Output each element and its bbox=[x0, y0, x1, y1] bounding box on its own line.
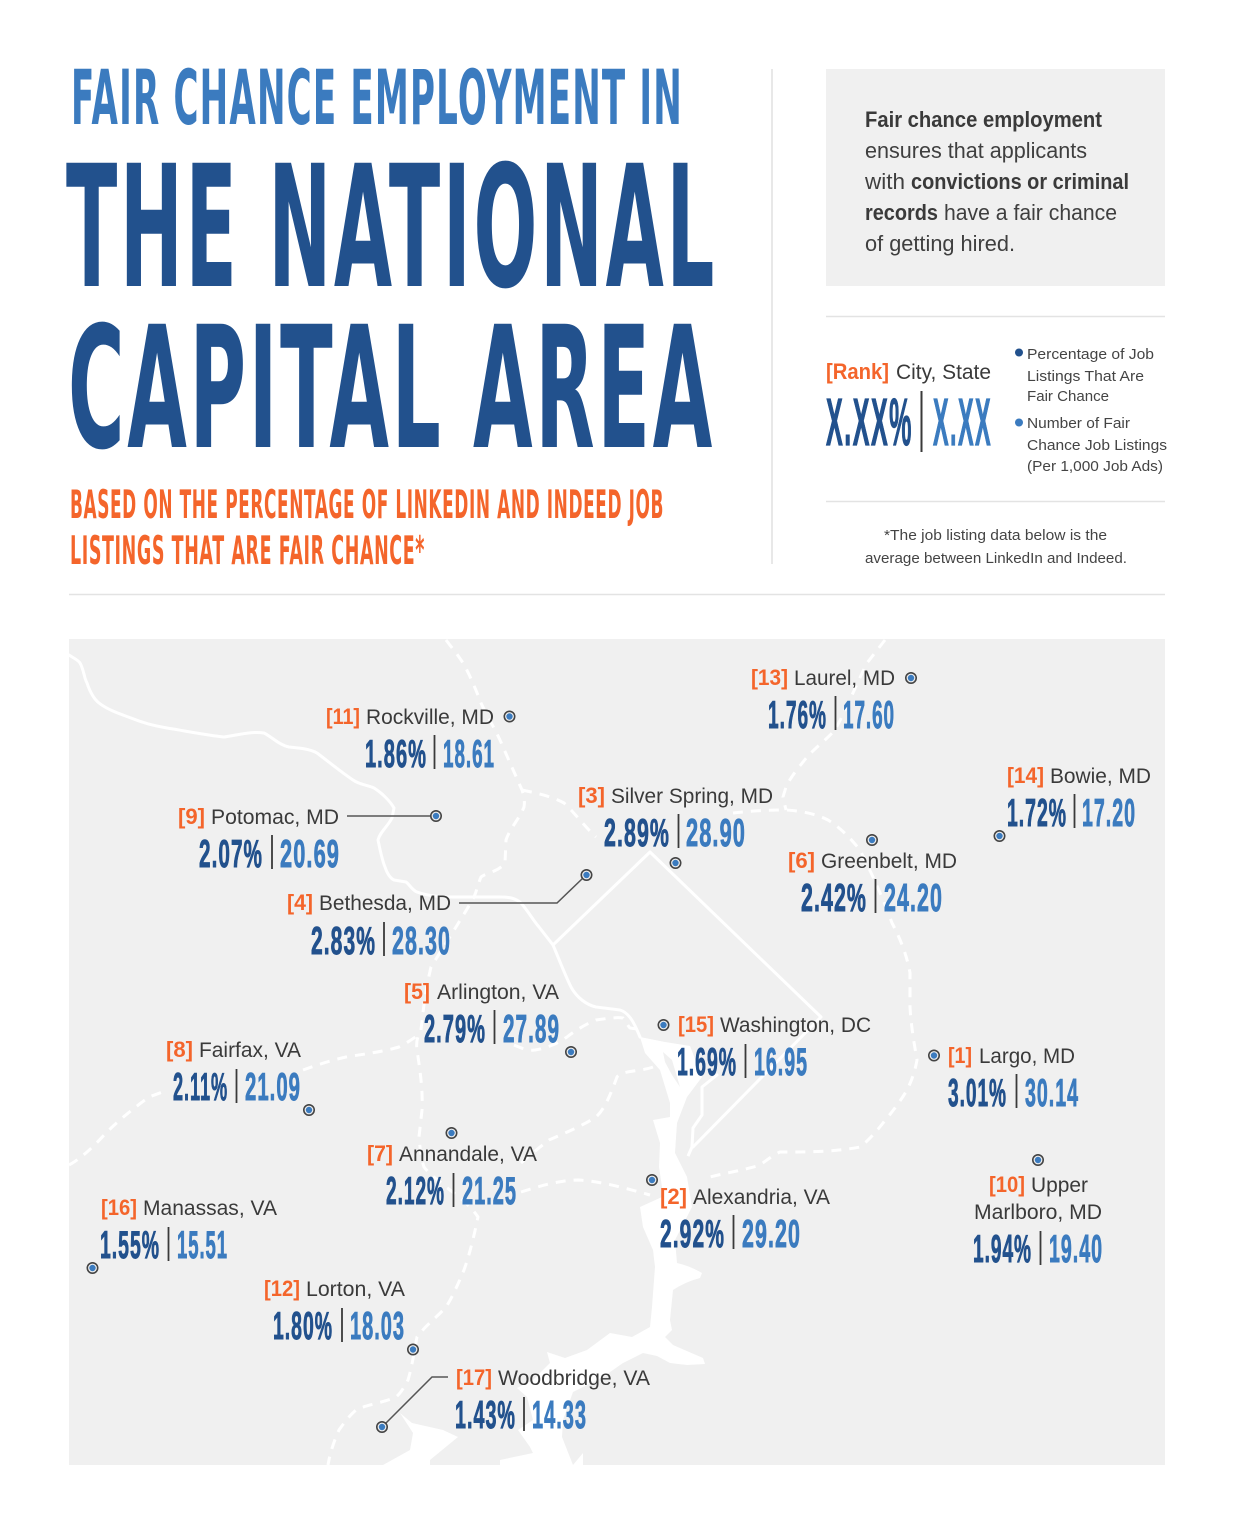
city: Bowie: Bowie, MD bbox=[1050, 765, 1151, 788]
city: Silver Spring: Silver Spring, MD bbox=[611, 785, 773, 808]
city: Arlington: 27.89 bbox=[503, 1008, 560, 1051]
city: Fairfax: [8] bbox=[166, 1037, 193, 1062]
legend: X.XX% bbox=[826, 385, 913, 460]
subtitle bbox=[70, 483, 664, 574]
city: Woodbridge: [17] bbox=[456, 1365, 492, 1390]
legend: Fair Chance bbox=[1027, 388, 1109, 405]
city: Washington: Washington, DC bbox=[720, 1014, 871, 1037]
city: Laurel: 1.76% bbox=[768, 694, 827, 737]
city: Bethesda: [4] bbox=[287, 890, 313, 915]
city: Rockville bbox=[326, 704, 515, 776]
map: solid boundary lines bbox=[69, 655, 821, 1147]
title bbox=[66, 53, 717, 487]
city: Laurel: 17.60 bbox=[843, 694, 895, 737]
panel: definition of fair chance employment: have a fair chance bbox=[944, 200, 1117, 225]
city: Silver Spring: 2.89% bbox=[604, 812, 670, 855]
city: Greenbelt bbox=[788, 835, 957, 920]
legend: [Rank] bbox=[826, 359, 889, 384]
city: Annandale bbox=[367, 1128, 537, 1213]
city: Upper Marlboro: [10] bbox=[989, 1172, 1025, 1197]
city: Rockville: [11] bbox=[326, 704, 360, 729]
map background bbox=[69, 639, 1165, 1465]
city: Manassas: 1.55% bbox=[100, 1224, 160, 1267]
city: Lorton: [12] bbox=[264, 1276, 300, 1301]
city: Arlington: [5] bbox=[404, 979, 430, 1004]
city: Largo: [1] bbox=[948, 1043, 972, 1068]
city: Laurel: Laurel, MD bbox=[794, 667, 895, 690]
city: Bethesda: 28.30 bbox=[392, 920, 451, 963]
city: Upper Marlboro: 19.40 bbox=[1049, 1228, 1103, 1271]
city: Annandale: [7] bbox=[367, 1141, 393, 1166]
city: Manassas: 15.51 bbox=[177, 1224, 228, 1267]
city: Bethesda bbox=[287, 870, 592, 963]
panel: definition of fair chance employment: Fair chance employment bbox=[865, 107, 1103, 132]
legend: X.XX bbox=[933, 385, 992, 460]
city: Upper Marlboro: 1.94% bbox=[973, 1228, 1032, 1271]
city: Largo: 3.01% bbox=[948, 1072, 1007, 1115]
city: Fairfax: Fairfax, VA bbox=[199, 1039, 301, 1062]
city: Greenbelt: Greenbelt, MD bbox=[821, 850, 957, 873]
panel: map bbox=[69, 639, 1165, 1465]
city: Alexandria bbox=[647, 1175, 830, 1256]
city: Potomac bbox=[178, 804, 441, 876]
city: Upper Marlboro bbox=[973, 1155, 1103, 1271]
city: Manassas: [16] bbox=[101, 1195, 137, 1220]
city: Washington: 16.95 bbox=[754, 1041, 808, 1084]
city: Woodbridge: 14.33 bbox=[532, 1394, 587, 1437]
city: Fairfax: 2.11% bbox=[173, 1066, 228, 1109]
panel: definition of fair chance employment bbox=[826, 69, 1165, 286]
map: river bbox=[383, 1037, 705, 1465]
city: Lorton bbox=[264, 1276, 418, 1355]
city: Bowie: [14] bbox=[1007, 763, 1044, 788]
city: Woodbridge bbox=[377, 1365, 650, 1437]
city: Greenbelt: [6] bbox=[788, 848, 815, 873]
city: Woodbridge: Woodbridge, VA bbox=[498, 1367, 650, 1390]
city: Manassas: Manassas, VA bbox=[143, 1197, 277, 1220]
city: Arlington: Arlington, VA bbox=[437, 981, 559, 1004]
city: Lorton: Lorton, VA bbox=[306, 1278, 405, 1301]
city: Washington: 1.69% bbox=[677, 1041, 737, 1084]
city: Silver Spring bbox=[578, 783, 773, 868]
footnote: average between LinkedIn and Indeed. bbox=[865, 550, 1127, 567]
city: Bowie bbox=[994, 763, 1151, 841]
panel: definition of fair chance employment: ensures that applicants bbox=[865, 138, 1087, 163]
city: Annandale: 2.12% bbox=[386, 1170, 445, 1213]
city: Manassas bbox=[87, 1195, 277, 1273]
panel: definition of fair chance employment: with bbox=[864, 169, 905, 194]
legend: (Per 1,000 Job Ads) bbox=[1027, 458, 1163, 475]
city: Washington bbox=[658, 1012, 871, 1084]
city: Bowie: 1.72% bbox=[1007, 792, 1067, 835]
city: Fairfax: 21.09 bbox=[245, 1066, 301, 1109]
panel: definition of fair chance employment: of getting hired. bbox=[865, 231, 1015, 256]
panel: definition of fair chance employment: convictions or criminal bbox=[911, 169, 1129, 194]
city: Silver Spring: [3] bbox=[578, 783, 605, 808]
subtitle: LISTINGS THAT ARE FAIR CHANCE* bbox=[70, 529, 425, 574]
city: Potomac: [9] bbox=[178, 804, 205, 829]
city: Alexandria: 2.92% bbox=[660, 1213, 725, 1256]
city: Fairfax bbox=[166, 1037, 314, 1115]
legend: Chance Job Listings bbox=[1027, 437, 1167, 454]
city: Lorton: 18.03 bbox=[350, 1305, 405, 1348]
legend: Percentage of Job bbox=[1027, 346, 1154, 363]
city: Bethesda: Bethesda, MD bbox=[319, 892, 451, 915]
city: Laurel bbox=[751, 665, 916, 737]
city: Washington: [15] bbox=[678, 1012, 714, 1037]
city: Largo bbox=[929, 1043, 1079, 1115]
city: Silver Spring: 28.90 bbox=[686, 812, 746, 855]
city: Upper Marlboro: Upper bbox=[1031, 1174, 1088, 1197]
city: Arlington: 2.79% bbox=[424, 1008, 486, 1051]
city: Potomac: 2.07% bbox=[199, 833, 263, 876]
city: Alexandria: [2] bbox=[660, 1184, 687, 1209]
footnote: *The job listing data below is the bbox=[884, 527, 1107, 544]
city: Potomac: 20.69 bbox=[280, 833, 340, 876]
legend: Listings That Are bbox=[1027, 368, 1144, 385]
legend: Number of Fair bbox=[1027, 415, 1130, 432]
legend: City, State bbox=[896, 361, 991, 384]
city: Annandale: Annandale, VA bbox=[399, 1143, 537, 1166]
legend bbox=[826, 346, 1167, 475]
city: Lorton: 1.80% bbox=[273, 1305, 333, 1348]
map: river island bbox=[663, 1052, 680, 1087]
city: Annandale: 21.25 bbox=[462, 1170, 517, 1213]
city: Potomac: Potomac, MD bbox=[211, 806, 339, 829]
city: Woodbridge: 1.43% bbox=[455, 1394, 516, 1437]
city: Largo: 30.14 bbox=[1025, 1072, 1079, 1115]
map: dashed county lines bbox=[69, 640, 917, 1465]
city: Largo: Largo, MD bbox=[979, 1045, 1075, 1068]
city: Alexandria: 29.20 bbox=[742, 1213, 801, 1256]
city: Bethesda: 2.83% bbox=[311, 920, 376, 963]
city: Laurel: [13] bbox=[751, 665, 788, 690]
city: Arlington bbox=[404, 979, 576, 1057]
city: Rockville: Rockville, MD bbox=[366, 706, 494, 729]
city: Greenbelt: 24.20 bbox=[884, 877, 943, 920]
city: Rockville: 1.86% bbox=[365, 733, 427, 776]
footnote bbox=[865, 527, 1127, 567]
city: Upper Marlboro: Marlboro, MD bbox=[974, 1201, 1102, 1224]
city: Greenbelt: 2.42% bbox=[801, 877, 867, 920]
city: Alexandria: Alexandria, VA bbox=[693, 1186, 830, 1209]
panel: definition of fair chance employment: records bbox=[865, 200, 938, 225]
city: Rockville: 18.61 bbox=[443, 733, 495, 776]
city: Bowie: 17.20 bbox=[1082, 792, 1136, 835]
